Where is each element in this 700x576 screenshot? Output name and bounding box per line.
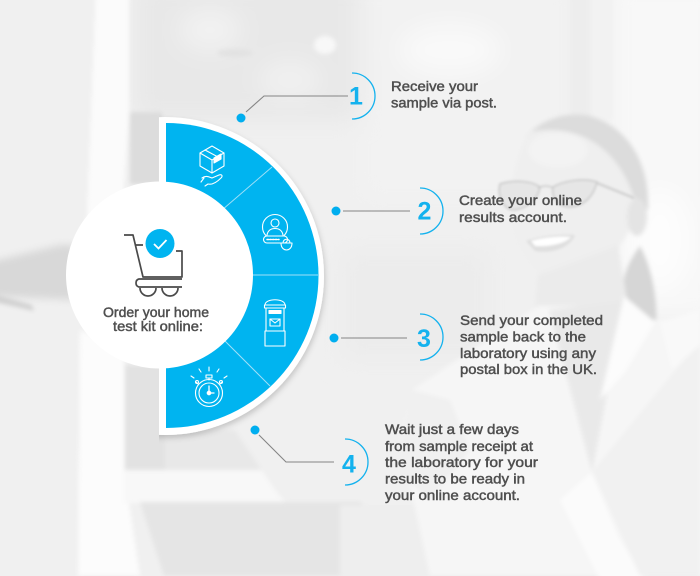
step 4 number (342, 439, 368, 485)
step 3 text: Send your completed (460, 313, 603, 328)
lab coat (400, 296, 700, 576)
step 2 connector (332, 206, 410, 216)
step 4 text (385, 422, 539, 503)
step 2 text (459, 193, 582, 225)
ponytail shape (623, 246, 656, 328)
blue half ring (166, 123, 318, 428)
step 4 number: 4 (342, 450, 356, 478)
centre white circle (66, 182, 253, 368)
icon: user account with password lock (262, 214, 292, 250)
step 4 text: results to be ready in (385, 472, 525, 486)
step 1 text: sample via post. (391, 96, 497, 110)
step 3 text: postal box in the UK. (460, 362, 597, 377)
step 4 text: Wait just a few days (385, 422, 519, 437)
step 4 text: from sample receipt at (385, 439, 533, 454)
centre label: test kit online: (113, 319, 203, 334)
step 3 text: laboratory using any (460, 346, 596, 361)
centre label (103, 305, 209, 334)
step 1 text (391, 79, 497, 110)
step 2 text: Create your online (459, 193, 582, 208)
icon: parcel in hand (200, 146, 224, 186)
step 3 text (460, 313, 603, 377)
icon: stopwatch (191, 367, 227, 406)
step 3 connector (330, 334, 407, 342)
icon: shopping cart with check badge (124, 229, 182, 296)
circular process wheel (66, 117, 328, 440)
step 2 number (418, 188, 443, 234)
step 4 connector (250, 426, 334, 462)
step 4 text: your online account. (385, 488, 520, 503)
step 1 number: 1 (349, 82, 363, 110)
step 1 number (349, 73, 375, 119)
step 2 number: 2 (418, 198, 431, 226)
icon: post box (264, 300, 286, 346)
centre label: Order your home (103, 305, 209, 320)
step 2 text: results account. (459, 210, 567, 225)
step 3 text: sample back to the (460, 330, 586, 344)
step 3 number: 3 (417, 325, 431, 353)
smile (526, 235, 575, 252)
step 1 text: Receive your (391, 79, 479, 94)
face shape (510, 130, 636, 280)
step 1 connector (236, 96, 348, 122)
segment dividers (222, 167, 318, 386)
hair shape (526, 115, 648, 210)
white ring backing (159, 117, 328, 440)
glasses (499, 180, 634, 210)
step 3 number (417, 314, 443, 360)
step 4 text: the laboratory for your (385, 455, 539, 470)
